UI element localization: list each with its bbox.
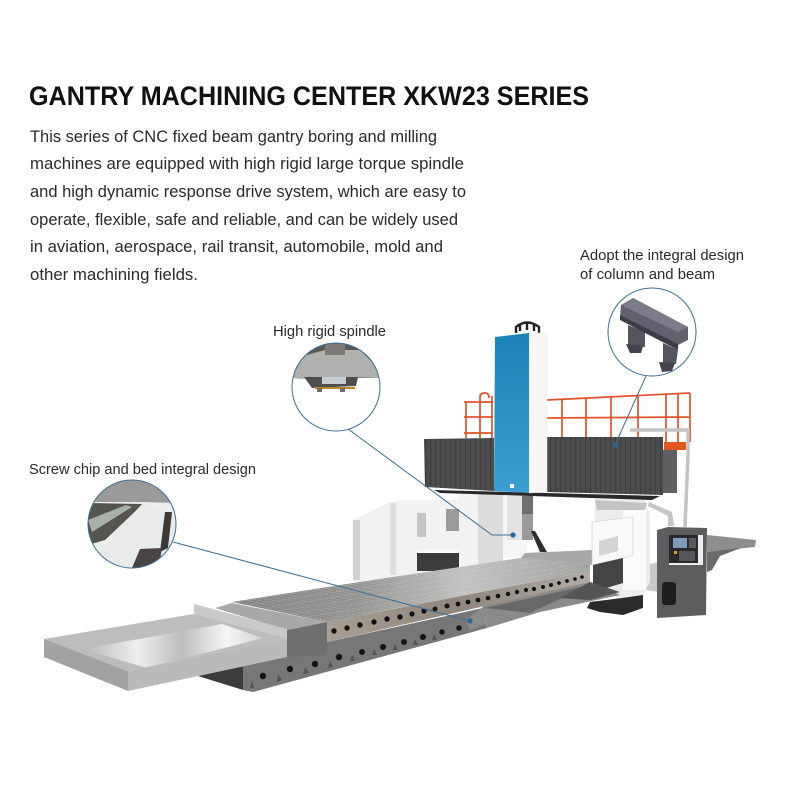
title: GANTRY MACHINING CENTER XKW23 SERIES — [29, 81, 589, 111]
control cabinet — [657, 527, 707, 618]
callout: integral design of column and beam — [580, 248, 744, 448]
right rear tail — [645, 535, 756, 592]
tray right face — [128, 638, 287, 691]
label: Adopt the integral design — [580, 248, 744, 264]
tray top rim — [44, 614, 287, 671]
leader line — [173, 542, 470, 621]
machine illustration — [44, 322, 756, 692]
intro text block: and high dynamic response drive system, which are easy to — [30, 183, 466, 201]
intro text block: other machining fields. — [30, 266, 198, 284]
intro text block: This series of CNC fixed beam gantry boring and milling — [30, 128, 437, 146]
gantry beam right — [434, 437, 677, 500]
marker square — [613, 443, 618, 448]
marker dot — [467, 618, 473, 624]
intro text block: machines are equipped with high rigid large torque spindle — [30, 155, 464, 173]
callout: high rigid spindle — [273, 324, 516, 538]
tray left face — [44, 639, 128, 691]
magnifier: column and beam casting — [608, 288, 696, 376]
chip tray and covers — [44, 603, 327, 691]
work table — [232, 558, 590, 642]
leader line — [348, 429, 513, 535]
magnifier: spindle — [292, 343, 380, 431]
intro text block: in aviation, aerospace, rail transit, automobile, mold and — [30, 238, 443, 256]
label: High rigid spindle — [273, 324, 386, 340]
gantry beam left — [424, 438, 494, 491]
base bed — [198, 608, 487, 692]
blue ram cover — [494, 333, 547, 493]
saddle under table — [466, 582, 620, 630]
label: of column and beam — [580, 267, 715, 283]
callout: screw chip and bed integral design — [29, 462, 473, 624]
coolant pipe — [630, 430, 688, 527]
plate behind table — [520, 550, 592, 565]
label — [580, 248, 744, 283]
cable carrier — [516, 322, 539, 333]
left enclosure — [353, 500, 459, 581]
intro text block — [30, 128, 466, 284]
left column — [459, 494, 547, 566]
magnifier: screw — [88, 480, 176, 572]
orange safety railing — [464, 393, 690, 450]
right column — [587, 499, 674, 615]
label: Screw chip and bed integral design — [29, 462, 256, 478]
intro text block: operate, flexible, safe and reliable, and can be widely used — [30, 211, 458, 229]
marker dot — [510, 532, 516, 538]
leader line — [615, 376, 646, 445]
tray shiny floor — [83, 624, 263, 668]
